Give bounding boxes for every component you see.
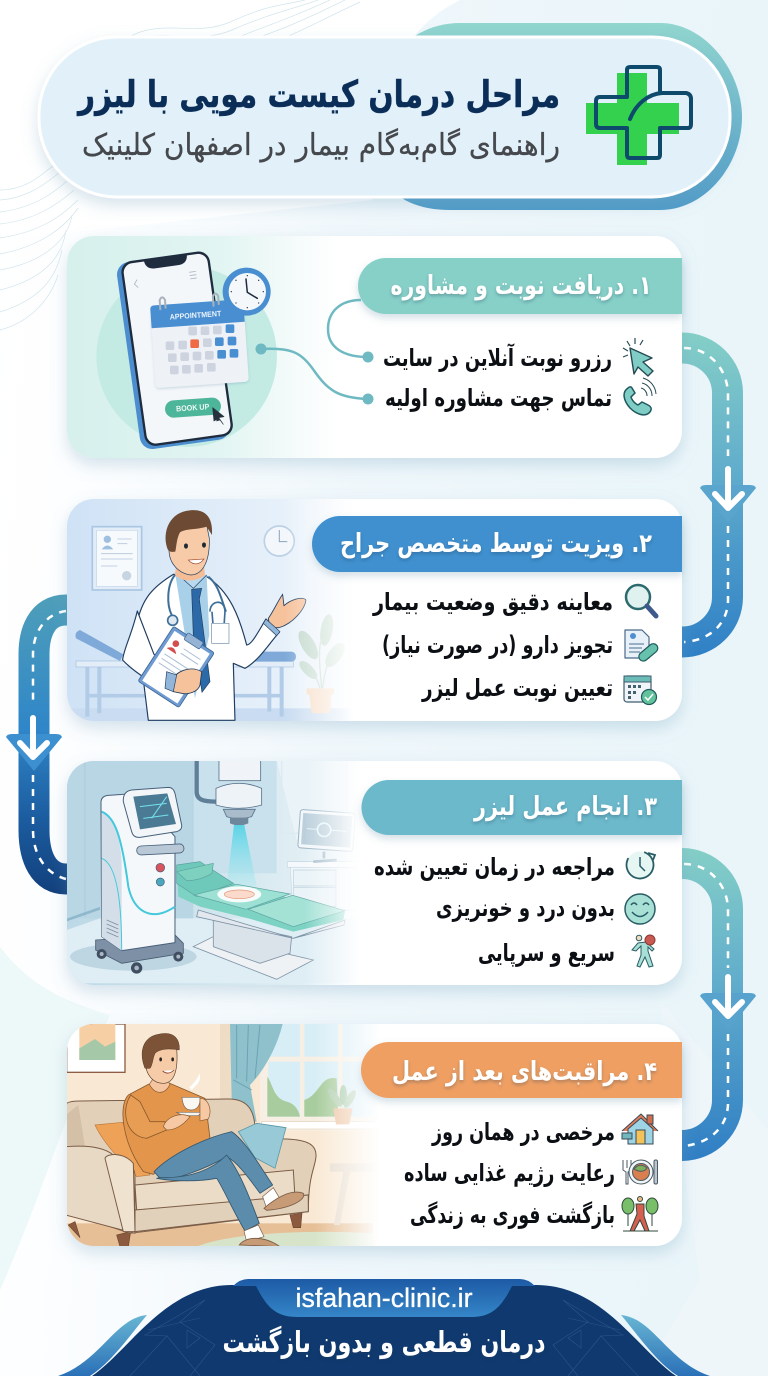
heading: step 3 [362, 780, 682, 835]
icon: plate and utensils [623, 1160, 658, 1184]
panel: step 3 [67, 760, 682, 985]
website ribbon: isfahan-clinic.ir [296, 1283, 473, 1313]
panel: step 2 [67, 499, 682, 722]
text: step 1 item 2: تماس جهت مشاوره اولیه [385, 384, 612, 412]
illustration: phone with calendar [96, 250, 277, 451]
panel: step 4 [66, 1024, 682, 1247]
text: step 3 item 3: سریع و سرپایی [478, 939, 615, 967]
connector lines: step 1 [256, 300, 374, 404]
icon: calendar check [624, 676, 656, 704]
illustration: phone with calendar: BOOK UP [176, 402, 210, 413]
website ribbon [233, 1279, 535, 1317]
icon: prescription and pill [625, 630, 660, 663]
decorative swoosh right [621, 1315, 710, 1376]
icon: medical cross logo [586, 67, 691, 165]
footer [58, 1279, 710, 1376]
illustration: man resting on sofa [67, 1024, 374, 1246]
header back pill [385, 23, 742, 210]
illustration: doctor [67, 499, 344, 721]
text: step 2 item 2: تجویز دارو (در صورت نیاز) [382, 631, 613, 659]
arrow: step 2 to step 3 [6, 610, 73, 879]
footer navy band [92, 1285, 676, 1376]
text: step 2 item 3: تعیین نوبت عمل لیزر [421, 674, 613, 702]
text: step 4 item 2: رعایت رژیم غذایی ساده [404, 1159, 615, 1187]
icon: clock refresh [623, 848, 657, 882]
icon: phone [624, 378, 656, 415]
heading: step 3: ۳. انجام عمل لیزر [472, 792, 657, 822]
illustration: laser machine and bed [67, 761, 356, 985]
panel: step 1 [67, 236, 682, 458]
decorative swoosh left [58, 1315, 147, 1376]
text: step 3 item 2: بدون درد و خونریزی [436, 894, 615, 922]
icon: fast walker [632, 935, 655, 967]
header pill [39, 37, 730, 197]
heading: step 4: ۴. مراقبت‌های بعد از عمل [392, 1057, 657, 1087]
icon: walking in park [622, 1196, 658, 1231]
subtitle: راهنمای گام‌به‌گام بیمار در اصفهان کلینیک [82, 128, 560, 163]
icon: home [622, 1114, 658, 1144]
text: step 4 item 1: مرخصی در همان روز [431, 1118, 615, 1146]
heading: step 4 [361, 1042, 682, 1098]
icon: smile [625, 894, 655, 924]
arrow: step 3 to step 4 [675, 864, 756, 1146]
heading: step 2 [312, 516, 682, 572]
text: step 3 item 1: مراجعه در زمان تعیین شده [374, 853, 615, 881]
footer slogan: درمان قطعی و بدون بازگشت [222, 1325, 546, 1359]
heading: step 1: ۱. دریافت نوبت و مشاوره [390, 271, 652, 301]
text: step 4 item 3: بازگشت فوری به زندگی [410, 1201, 615, 1229]
heading: step 2: ۲. ویزیت توسط متخصص جراح [340, 529, 652, 559]
icon: magnifier [626, 585, 656, 616]
illustration: phone with calendar: APPOINTMENT [169, 309, 222, 322]
heading: step 1 [358, 258, 682, 314]
text: step 2 item 1: معاینه دقیق وضعیت بیمار [372, 588, 613, 616]
arrow: step 1 to step 2 [675, 348, 756, 642]
text: step 1 item 1: رزرو نوبت آنلاین در سایت [383, 343, 612, 372]
icon: cursor click [623, 338, 653, 376]
title: مراحل درمان کیست مویی با لیزر [76, 73, 560, 116]
